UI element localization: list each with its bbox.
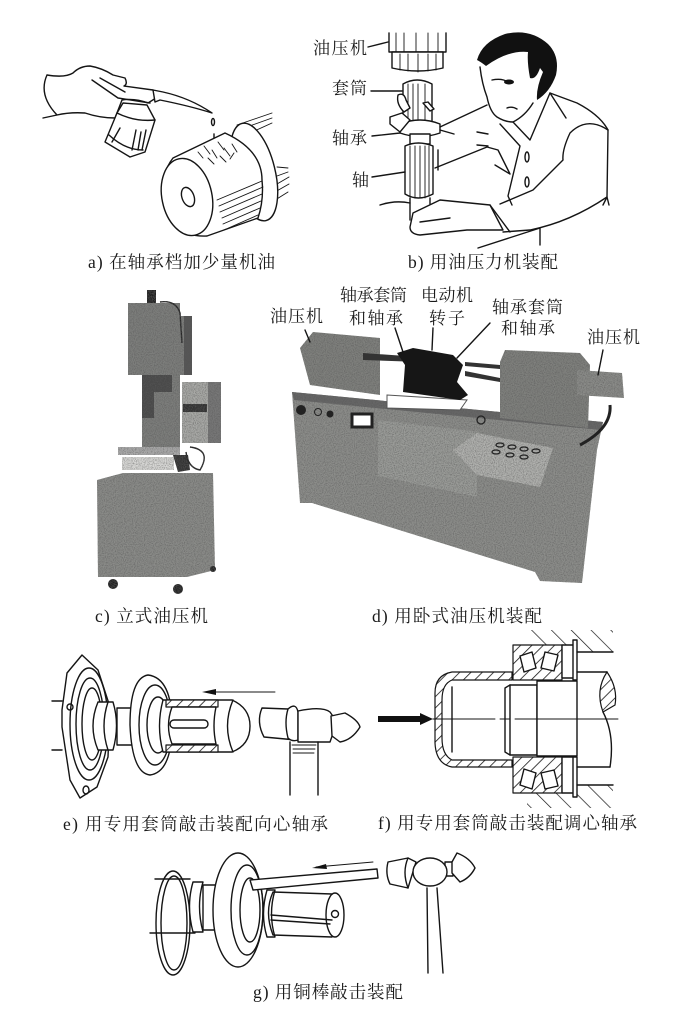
icon: press ram, sleeve, bearing and shaft bbox=[389, 33, 446, 220]
callouts: 和轴承 bbox=[501, 319, 555, 338]
drawing: flange, bearing, rod bbox=[150, 853, 378, 975]
photo: horizontal press machine bbox=[292, 332, 624, 583]
panel f: sleeve striking self-aligning bearing bbox=[378, 630, 638, 833]
callouts: 轴承 bbox=[332, 129, 367, 148]
icon: hammer bbox=[259, 706, 360, 795]
panel e: sleeve striking radial bearing bbox=[52, 655, 360, 834]
caption b: b) 用油压力机装配 bbox=[408, 252, 558, 272]
callouts: 轴承套筒 bbox=[492, 298, 563, 317]
callouts: 转子 bbox=[429, 309, 465, 328]
callouts: 和轴承 bbox=[349, 309, 403, 328]
icon: man operating press bbox=[380, 32, 609, 248]
callouts: 轴承套筒 bbox=[340, 286, 407, 305]
panel c: vertical hydraulic press bbox=[95, 290, 221, 626]
panel b: hydraulic press assembly bbox=[313, 32, 609, 272]
panel d: horizontal hydraulic press bbox=[270, 286, 640, 626]
callouts: 轴 bbox=[352, 171, 369, 190]
drawing: section view bbox=[378, 630, 618, 808]
callouts: 油压机 bbox=[313, 39, 367, 58]
panel a: oiling the bearing seat bbox=[43, 66, 289, 272]
icon: hammer bbox=[387, 853, 475, 973]
caption d: d) 用卧式油压机装配 bbox=[372, 606, 542, 626]
caption g: g) 用铜棒敲击装配 bbox=[253, 982, 403, 1002]
callouts: 电动机 bbox=[421, 286, 473, 305]
callouts bbox=[270, 286, 640, 375]
caption f: f) 用专用套筒敲击装配调心轴承 bbox=[378, 813, 638, 833]
callouts: 油压机 bbox=[587, 328, 640, 347]
drawing: flange, bearing and sleeve bbox=[52, 655, 275, 798]
panel g: copper rod striking bbox=[150, 853, 475, 1002]
icon: hand holding oil can bbox=[43, 66, 214, 157]
caption a: a) 在轴承档加少量机油 bbox=[88, 252, 275, 272]
caption c: c) 立式油压机 bbox=[95, 606, 208, 626]
caption e: e) 用专用套筒敲击装配向心轴承 bbox=[63, 814, 328, 834]
callouts: 套筒 bbox=[332, 79, 367, 98]
callouts bbox=[313, 39, 405, 190]
icon: shaft with bearing seat bbox=[154, 113, 289, 240]
callouts: 油压机 bbox=[270, 307, 323, 326]
photo: vertical press machine bbox=[97, 290, 221, 594]
